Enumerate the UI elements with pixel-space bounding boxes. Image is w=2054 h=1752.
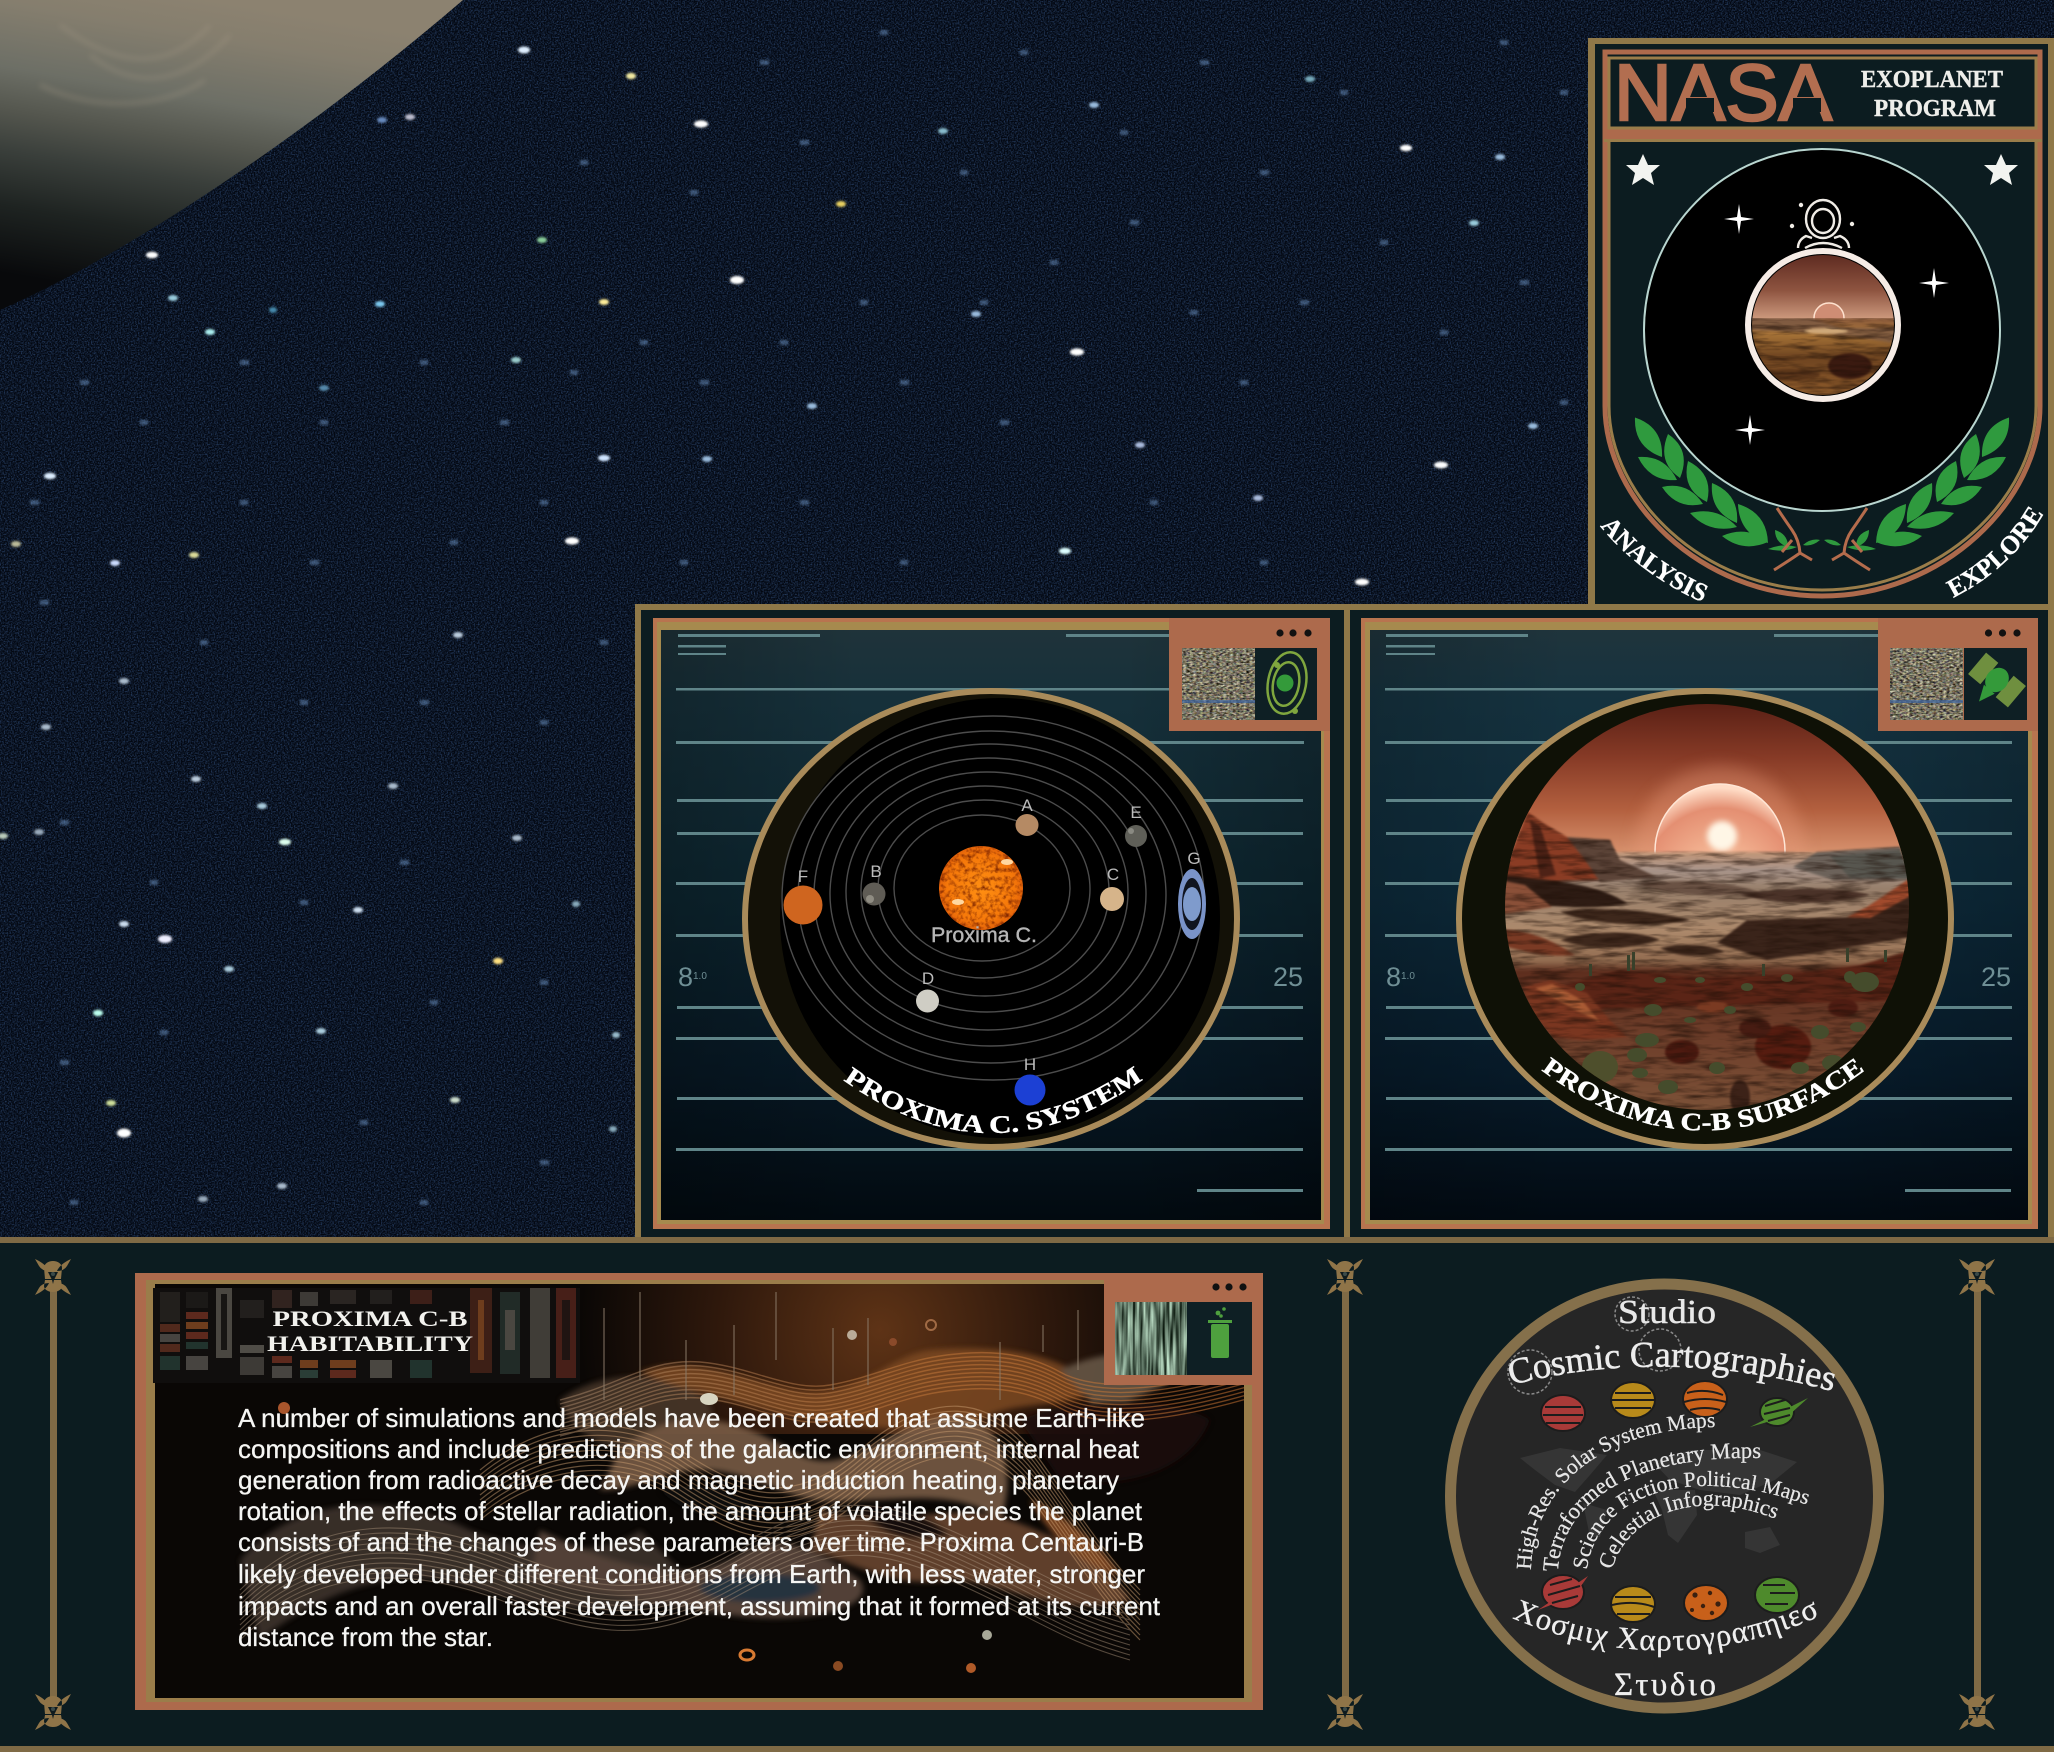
- service list arcs: [1512, 1408, 1840, 1572]
- bright stars: [0, 46, 1538, 1202]
- vertical ornament rule: right: [1959, 1259, 1995, 1730]
- panel: Proxima C-B surface: [1361, 618, 2038, 1229]
- panel: habitability: [135, 1273, 1263, 1710]
- tab with signal and icon: [1104, 1273, 1263, 1385]
- studio roundel: Στυδιο: [1614, 1667, 1716, 1703]
- stars: [1626, 154, 2018, 185]
- panel: Proxima C. system: [653, 618, 1330, 1229]
- scale numerals: 8: [1386, 962, 1401, 992]
- panel heading: PROXIMA C-B: [272, 1306, 468, 1331]
- planet letters: E: [1130, 803, 1142, 822]
- panel frame: [135, 1273, 1263, 1710]
- scale numerals: [678, 962, 1303, 992]
- scale numerals: 1.0: [1401, 971, 1415, 982]
- planet letters: F: [798, 867, 808, 886]
- program name: [1861, 67, 2003, 122]
- curved badge words: ANALYSIS: [1600, 520, 1708, 600]
- cacti: [1589, 948, 1887, 976]
- greek title: [1512, 1600, 1850, 1651]
- planet letters: C: [1107, 865, 1119, 884]
- wave art background: [155, 1284, 1250, 1698]
- orbit disc: [745, 691, 1237, 1147]
- curved badge words: [1600, 506, 2044, 600]
- panel frame: [653, 618, 1330, 1229]
- shrubs: [1575, 971, 1879, 1094]
- dark ridges: [1500, 875, 1627, 907]
- icon: orbit: [1263, 649, 1311, 717]
- body text: [238, 1403, 1161, 1652]
- surface disc: PROXIMA C-B SURFACE: [1541, 1056, 1864, 1131]
- curved title: [843, 1055, 1172, 1133]
- service list arcs: Terraformed Planetary Maps: [1543, 1443, 1760, 1571]
- service list arcs: Celestial Infographics: [1600, 1492, 1778, 1568]
- data lines: [1385, 634, 2012, 1192]
- body text: compositions and include predictions of the galactic environment, internal heat: [238, 1434, 1140, 1464]
- orbits: [782, 716, 1204, 1080]
- scale numerals: 8: [678, 962, 693, 992]
- panel frame: [1361, 618, 2038, 1229]
- body text: generation from radioactive decay and magnetic induction heating, planetary: [238, 1465, 1119, 1495]
- NASA badge: [1600, 48, 2044, 600]
- service list arcs: Science Fiction Political Maps: [1574, 1470, 1809, 1568]
- program name: PROGRAM: [1874, 96, 1996, 122]
- body text: distance from the star.: [238, 1622, 493, 1652]
- panel heading: HABITABILITY: [267, 1331, 473, 1356]
- star label: Proxima C.: [931, 924, 1037, 947]
- planet limb in top-left corner: [0, 0, 463, 310]
- tab with signal and icon: [1169, 618, 1330, 731]
- sparkles: [1724, 204, 1949, 445]
- icon: satellite: [1959, 653, 2026, 718]
- black emblem circle: [1644, 149, 2000, 511]
- shield gold inline: [1609, 58, 2036, 590]
- scale numerals: 1.0: [693, 971, 707, 982]
- header band: [1604, 48, 2042, 142]
- title block with book spines: [153, 1288, 580, 1383]
- wave lines: [240, 1353, 1250, 1660]
- studio roundel: [1450, 1284, 1878, 1708]
- studio roundel: Χοσμιχ Χαρτογραπηιεσ: [1512, 1600, 1816, 1658]
- flourishes on capitals: [1508, 1297, 1681, 1394]
- data lines: [676, 634, 1304, 1192]
- panel heading: [267, 1306, 473, 1356]
- craters and rocks: [1665, 1040, 1699, 1064]
- body text: A number of simulations and models have been created that assume Earth-like: [238, 1403, 1145, 1433]
- dark right hill: [1716, 896, 1909, 962]
- scale numerals: 25: [1981, 962, 2011, 992]
- tab with signal and icon: [1878, 618, 2038, 731]
- body text: consists of and the changes of these parameters over time. Proxima Centauri-B: [238, 1527, 1144, 1557]
- laurel wreath: [1635, 418, 2009, 551]
- planet letters: [798, 796, 1201, 1074]
- curved title: [1541, 1040, 1900, 1131]
- planets row: [1538, 1381, 1808, 1622]
- surface disc: [1456, 688, 1954, 1150]
- mesas: [1508, 812, 1599, 882]
- studio roundel: Cosmic Cartographies: [1509, 1342, 1835, 1390]
- body text: rotation, the effects of stellar radiation, the amount of volatile species the planet: [238, 1496, 1143, 1526]
- icon: beaker: [1208, 1307, 1232, 1358]
- vertical ornament rule: left: [35, 1259, 71, 1730]
- alien landscape: [1500, 700, 1920, 1117]
- node pins: [604, 1292, 1078, 1400]
- body text: likely developed under different conditions from Earth, with less water, stronger: [238, 1559, 1145, 1589]
- program name: EXOPLANET: [1861, 67, 2003, 93]
- red foreground: [1565, 950, 1912, 1010]
- left rock: [1523, 980, 1627, 1040]
- scale numerals: 25: [1273, 962, 1303, 992]
- sun: [939, 846, 1023, 930]
- astronaut helmet: [1791, 200, 1853, 248]
- shield outline: [1605, 52, 2040, 596]
- planets: [784, 814, 1206, 1106]
- dim stars: [30, 30, 1568, 1205]
- NASA logotype: NASA: [1614, 48, 1833, 137]
- wreath stems: [1774, 508, 1870, 570]
- orbit disc: PROXIMA C. SYSTEM: [843, 1066, 1143, 1134]
- blackletter heading: Studio: [1618, 1294, 1716, 1331]
- curved badge words: EXPLORE: [1945, 506, 2044, 598]
- planet letters: B: [870, 862, 882, 881]
- scale numerals: [1386, 962, 2011, 992]
- planet letters: D: [922, 969, 934, 988]
- vertical ornament rule: middle: [1327, 1259, 1363, 1730]
- mini landscape porthole: [1748, 251, 1900, 399]
- faint world map: [1520, 1448, 1797, 1553]
- planet letters: H: [1024, 1055, 1036, 1074]
- planet letters: G: [1187, 849, 1201, 868]
- service list arcs: High-Res. Solar System Maps: [1516, 1414, 1715, 1570]
- ribbons: [240, 1348, 1210, 1640]
- planet letters: A: [1021, 796, 1033, 815]
- body text: impacts and an overall faster development, assuming that it formed at its current: [238, 1591, 1161, 1621]
